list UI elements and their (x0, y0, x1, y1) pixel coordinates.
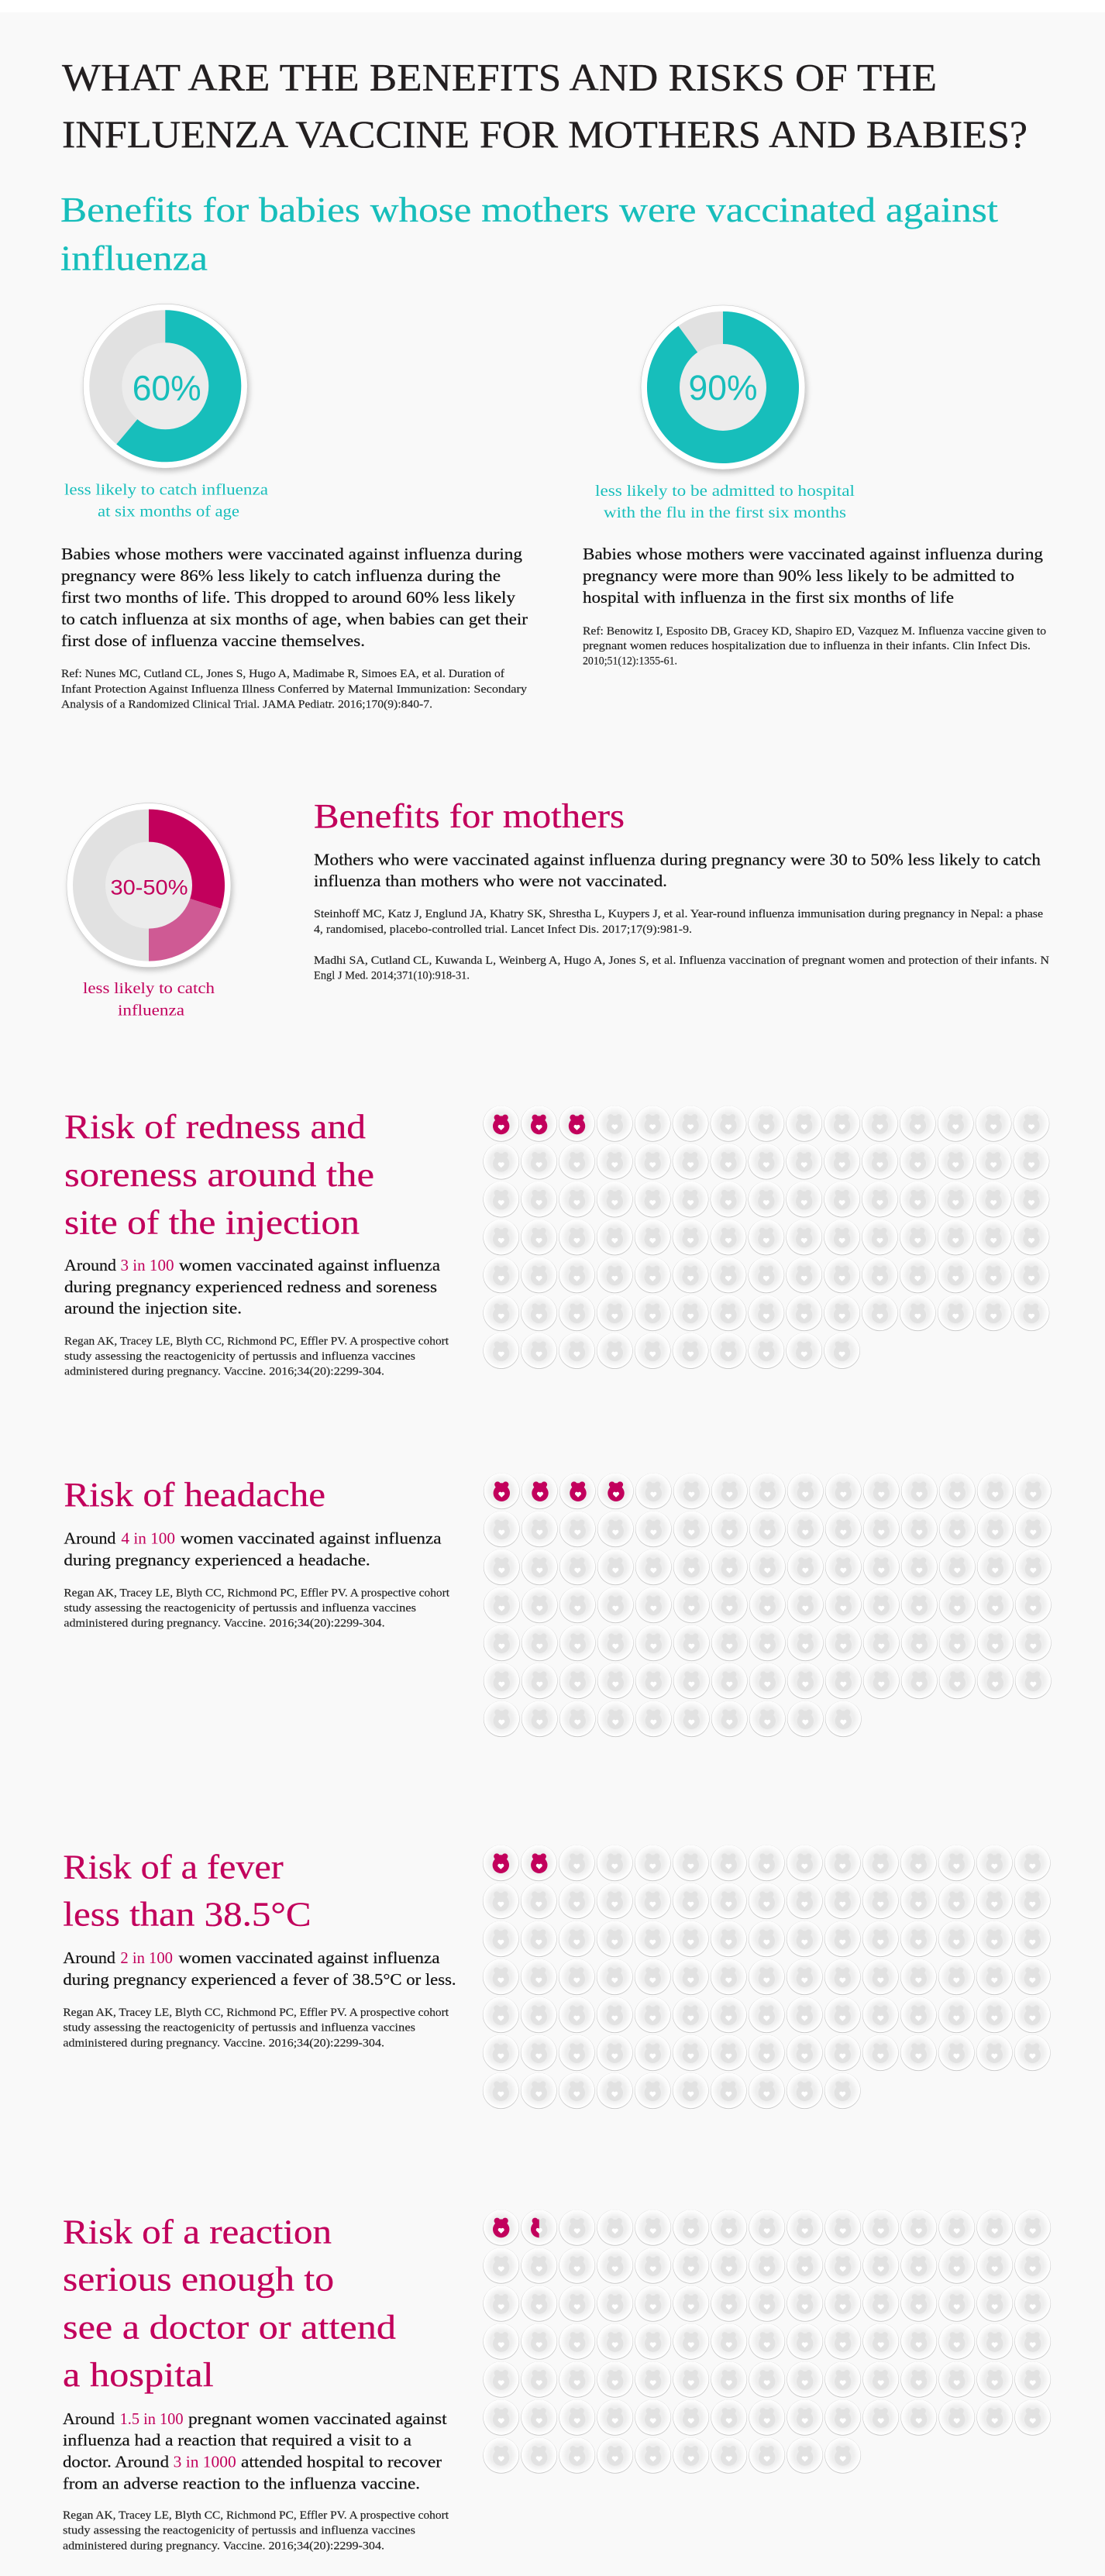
reference: Regan (redness) (64, 1336, 449, 1378)
reference: Regan (serious reaction): study assessing the reactogenicity of pertussis and influenza vaccines (63, 2525, 415, 2537)
body text: mothers (314, 851, 1041, 890)
reference: Regan (serious reaction): administered during pregnancy. Vaccine. 2016;34(20):2299-304. (63, 2540, 384, 2552)
reference: Steinhoff: Steinhoff MC, Katz J, Englund JA, Khatry SK, Shrestha L, Kuypers J, et al. Year-round influenza immunisation during pregnancy in Nepal: a phase (314, 908, 1043, 920)
reference: Regan (headache): Regan AK, Tracey LE, Blyth CC, Richmond PC, Effler PV. A prospective cohort (64, 1587, 450, 1599)
body text: babies catching influenza: pregnancy were 86% less likely to catch influenza during the (61, 566, 501, 585)
reference: Regan (headache) (64, 1587, 450, 1630)
body text: risk of headache: during pregnancy experienced a headache. (64, 1550, 370, 1569)
donut chart: 90% (641, 305, 805, 469)
reference: Regan (serious reaction) (63, 2509, 449, 2552)
reference: Regan (headache): study assessing the reactogenicity of pertussis and influenza vaccines (64, 1602, 416, 1615)
reference: Regan (serious reaction): Regan AK, Tracey LE, Blyth CC, Richmond PC, Effler PV. A prospective cohort (63, 2509, 449, 2522)
caption: 90% donut (595, 483, 855, 521)
donut chart: 60%: 60% (133, 369, 201, 408)
body text: risk of redness: women vaccinated against influenza (179, 1256, 441, 1274)
reference: Steinhoff (314, 908, 1043, 936)
body text: babies catching influenza: first dose of influenza vaccine themselves. (61, 631, 365, 650)
pictogram: 1.5 in 100 serious reaction (483, 2210, 1051, 2474)
reference: Nunes: Infant Protection Against Influenza Illness Conferred by Maternal Immunization: Secondary (61, 683, 528, 696)
body text: babies hospital admission: hospital with influenza in the first six months of life (583, 588, 954, 607)
body text: babies catching influenza (61, 545, 528, 650)
donut chart: 60% (83, 304, 247, 468)
heading: risk of fever: less than 38.5°C (63, 1896, 312, 1934)
reference: Regan (fever): administered during pregnancy. Vaccine. 2016;34(20):2299-304. (63, 2037, 384, 2049)
body text: risk of serious reaction (63, 2409, 447, 2492)
heading: risk of redness: Risk of redness and (64, 1108, 366, 1146)
body text: babies hospital admission: Babies whose mothers were vaccinated against influenza during (583, 545, 1044, 563)
reference: Madhi: Madhi SA, Cutland CL, Kuwanda L, Weinberg A, Hugo A, Jones S, et al. Influenza vaccination of pregnant women and protection of their infants. N (314, 954, 1049, 967)
reference: Nunes: Ref: Nunes MC, Cutland CL, Jones S, Hugo A, Madimabe R, Simoes EA, et al. Duration of (61, 668, 504, 680)
body text: risk of redness: Around (64, 1256, 117, 1274)
body text: risk of redness (64, 1256, 441, 1317)
donut chart: 30-50%: 30-50% (110, 875, 188, 899)
body text: babies catching influenza: Babies whose mothers were vaccinated against influenza during (61, 545, 523, 563)
heading: benefits for mothers: Benefits for mothers (314, 797, 625, 835)
body text: risk of serious reaction: influenza had a reaction that required a visit to a (63, 2431, 412, 2450)
heading: risk of serious reaction: Risk of a reaction (63, 2213, 332, 2251)
caption: 60% donut (64, 482, 268, 521)
reference: Benowitz: 2010;51(12):1355-61. (583, 655, 677, 668)
body text: risk of headache: 4 in 100 (121, 1529, 175, 1548)
heading: risk of redness: soreness around the (64, 1156, 374, 1194)
heading: risk of fever (63, 1848, 312, 1934)
body text: risk of fever: women vaccinated against influenza (178, 1948, 440, 1967)
caption: 30-50% donut: less likely to catch (83, 980, 215, 997)
body text: risk of headache: women vaccinated against influenza (181, 1529, 442, 1548)
reference: Madhi: Engl J Med. 2014;371(10):918-31. (314, 970, 470, 982)
heading: risk of redness: site of the injection (64, 1204, 360, 1241)
heading: risk of serious reaction: see a doctor or attend (63, 2309, 396, 2347)
body text: risk of headache: Around (64, 1529, 116, 1548)
body text: babies hospital admission (583, 545, 1044, 607)
caption: 90% donut: less likely to be admitted to hospital (595, 483, 855, 500)
reference: Madhi (314, 954, 1049, 982)
donut chart: 30-50% (67, 803, 231, 968)
body text: babies hospital admission: pregnancy were more than 90% less likely to be admitted to (583, 566, 1014, 585)
body text: risk of serious reaction: pregnant women vaccinated against (188, 2409, 447, 2428)
body text: risk of redness: 3 in 100 (121, 1256, 174, 1274)
reference: Benowitz: pregnant women reduces hospitalization due to influenza in their infants. Clin Infect Dis. (583, 640, 1031, 652)
reference: Nunes (61, 668, 528, 711)
caption: 60% donut: less likely to catch influenza (64, 482, 268, 499)
body text: risk of redness: around the injection site. (64, 1298, 242, 1317)
body text: risk of fever: 2 in 100 (120, 1948, 173, 1967)
body text: mothers: Mothers who were vaccinated against influenza during pregnancy were 30 to 50% less likely to catch (314, 851, 1041, 869)
heading: benefits for babies: Benefits for babies whose mothers were vaccinated against (60, 190, 998, 229)
reference: Benowitz: Ref: Benowitz I, Esposito DB, Gracey KD, Shapiro ED, Vazquez M. Influenza vaccine given to (583, 625, 1046, 638)
heading: risk of fever: Risk of a fever (63, 1848, 284, 1886)
heading: risk of serious reaction: a hospital (63, 2356, 214, 2394)
title: WHAT ARE THE BENEFITS AND RISKS OF THE (62, 56, 937, 99)
heading: benefits for babies: influenza (60, 239, 208, 277)
title: INFLUENZA VACCINE FOR MOTHERS AND BABIES? (62, 112, 1028, 156)
pictogram: 3 in 100 redness (483, 1106, 1049, 1369)
body text: babies catching influenza: first two months of life. This dropped to around 60% less likely (61, 588, 516, 607)
reference: Nunes: Analysis of a Randomized Clinical Trial. JAMA Pediatr. 2016;170(9):840-7. (61, 699, 432, 711)
body text: risk of fever: Around (63, 1948, 116, 1967)
heading: risk of redness (64, 1108, 374, 1241)
reference: Regan (headache): administered during pregnancy. Vaccine. 2016;34(20):2299-304. (64, 1618, 385, 1630)
body text: risk of serious reaction: 3 in 1000 (174, 2453, 236, 2471)
donut chart: 90%: 90% (688, 368, 758, 408)
caption: 90% donut: with the flu in the first six months (604, 504, 846, 521)
pictogram: 2 in 100 fever (483, 1845, 1051, 2109)
body text: risk of serious reaction: from an adverse reaction to the influenza vaccine. (63, 2474, 420, 2492)
heading: risk of serious reaction: serious enough to (63, 2261, 334, 2299)
reference: Regan (redness): administered during pregnancy. Vaccine. 2016;34(20):2299-304. (64, 1366, 384, 1378)
body text: risk of serious reaction: attended hospital to recover (241, 2453, 442, 2471)
body text: mothers: influenza than mothers who were not vaccinated. (314, 872, 667, 890)
pictogram: 4 in 100 headache (484, 1473, 1052, 1737)
heading: risk of headache: Risk of headache (64, 1476, 325, 1514)
reference: Benowitz (583, 625, 1046, 668)
body text: risk of serious reaction: doctor. Around (63, 2453, 170, 2471)
caption: 30-50% donut (83, 980, 215, 1020)
caption: 60% donut: at six months of age (98, 504, 239, 521)
body text: risk of serious reaction: 1.5 in 100 (120, 2409, 183, 2428)
heading: risk of serious reaction (63, 2213, 396, 2394)
reference: Regan (redness): Regan AK, Tracey LE, Blyth CC, Richmond PC, Effler PV. A prospective cohort (64, 1336, 449, 1348)
body text: risk of fever: during pregnancy experienced a fever of 38.5°C or less. (63, 1970, 456, 1989)
caption: 30-50% donut: influenza (118, 1003, 184, 1020)
body text: risk of redness: during pregnancy experienced redness and soreness (64, 1278, 437, 1296)
reference: Steinhoff: 4, randomised, placebo-controlled trial. Lancet Infect Dis. 2017;17(9):981-9. (314, 923, 692, 936)
reference: Regan (redness): study assessing the reactogenicity of pertussis and influenza vaccines (64, 1350, 415, 1363)
reference: Regan (fever): study assessing the reactogenicity of pertussis and influenza vaccines (63, 2022, 415, 2034)
heading: benefits for babies (60, 190, 998, 277)
body text: risk of serious reaction: Around (63, 2409, 115, 2428)
reference: Regan (fever) (63, 2007, 449, 2049)
body text: babies catching influenza: to catch influenza at six months of age, when babies can get their (61, 610, 528, 628)
body text: risk of fever (63, 1948, 456, 1989)
reference: Regan (fever): Regan AK, Tracey LE, Blyth CC, Richmond PC, Effler PV. A prospective cohort (63, 2007, 449, 2019)
title (62, 56, 1028, 156)
body text: risk of headache (64, 1529, 442, 1569)
